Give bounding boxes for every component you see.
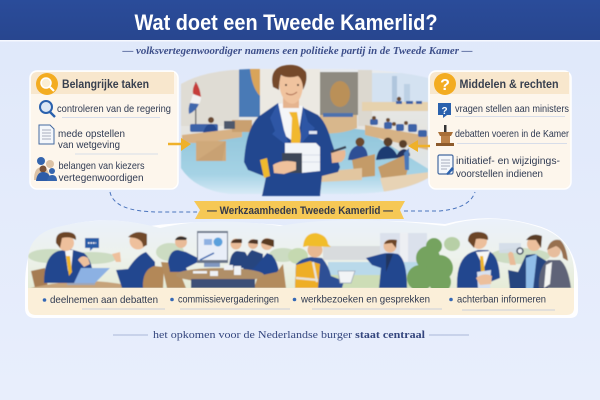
caption: werkbezoeken: werkbezoeken en gesprekken (300, 294, 430, 306)
illustrated scenes (28, 219, 574, 288)
left desks (182, 120, 252, 161)
icon: speech bubble (85, 238, 99, 251)
icon: lectern (436, 125, 454, 146)
shirt (278, 103, 303, 144)
right wall panel (320, 72, 358, 115)
right: voorstellen: initiatief- en wijzigings- (456, 155, 560, 167)
ribbon: Werkzaamheden Tweede Kamerlid: — Werkzaamheden Tweede Kamerlid — (207, 205, 393, 217)
icon: document (39, 125, 54, 144)
sleeve band (260, 158, 270, 178)
panel heading: Belangrijke taken (62, 77, 149, 91)
icon: search badge (36, 73, 58, 95)
task: regering: controleren van de regering (57, 103, 171, 115)
panel: Middelen en rechten (429, 71, 571, 189)
arrow: right panel to hall (408, 140, 430, 152)
icon: proposal document (438, 155, 454, 175)
seated member left (190, 117, 218, 133)
horizon trees (28, 243, 550, 264)
window (372, 73, 430, 103)
front members with seats (348, 138, 410, 180)
scene 3: werkbezoek (288, 233, 460, 293)
rear gallery people (396, 97, 422, 104)
central illustration: plenary hall with Kamerlid (180, 65, 430, 196)
task: wetgeving: mede opstellen (58, 128, 125, 140)
front desk (320, 168, 362, 182)
lapels (270, 103, 290, 148)
panel: Belangrijke taken: vertegenwoordigen (58, 172, 144, 184)
icon: question bubble: ? (441, 106, 448, 117)
right: ministers: vragen stellen aan ministers (455, 103, 569, 115)
panel: Middelen en rechten: voorstellen indienen (456, 168, 543, 180)
pin (309, 131, 317, 134)
hand (273, 161, 296, 174)
central Kamerlid figure (244, 65, 346, 196)
arrow: left panel to hall (168, 138, 191, 151)
water-blue floor (180, 128, 428, 191)
blue-orange wall artwork (239, 69, 260, 117)
tree (407, 237, 460, 293)
scene 1: debate (30, 232, 164, 288)
caption: debatten: deelnemen aan debatten (50, 294, 158, 306)
panel heading: Middelen & rechten (460, 77, 558, 91)
ribbon: Werkzaamheden Tweede Kamerlid (194, 201, 405, 219)
icon: people group (34, 157, 57, 181)
flag (189, 82, 201, 124)
icon: question badge: ? (440, 77, 450, 94)
connector: right dashed curve (404, 192, 475, 211)
footer tagline: het opkomen voor de Nederlandse burger staat centraal (153, 329, 425, 341)
panel header (430, 72, 569, 94)
icon: question badge (434, 73, 456, 95)
panel: Belangrijke taken: van wetgeving (58, 139, 120, 151)
right: debatten: debatten voeren in de Kamer (455, 128, 569, 140)
caption strip (28, 288, 574, 315)
documents (282, 143, 320, 173)
neck and head (283, 94, 299, 108)
jacket (244, 103, 340, 196)
subtitle: — volksvertegenwoordiger namens een politieke partij in de Tweede Kamer — (121, 46, 473, 57)
left wall (181, 70, 239, 126)
connector: left dashed curve (110, 192, 197, 212)
header banner (0, 0, 600, 42)
panel shadow and base (25, 218, 578, 318)
mid benches with members (365, 116, 428, 150)
scene 4: achterban (457, 232, 571, 290)
panel: Belangrijke taken (30, 71, 178, 189)
caption: commissie: commissievergaderingen (178, 294, 279, 306)
icon: question bubble (438, 103, 451, 118)
scene 2: commissie (161, 231, 286, 288)
rear rostrum right (320, 113, 357, 133)
caption: achterban: achterban informeren (457, 294, 546, 306)
panel header (31, 72, 174, 94)
panel: werkzaamheden (25, 215, 580, 318)
icon: magnifier (40, 101, 55, 117)
title: Wat doet een Tweede Kamerlid? (134, 10, 438, 35)
task: kiezers: belangen van kiezers (58, 160, 144, 172)
tie (289, 112, 302, 143)
